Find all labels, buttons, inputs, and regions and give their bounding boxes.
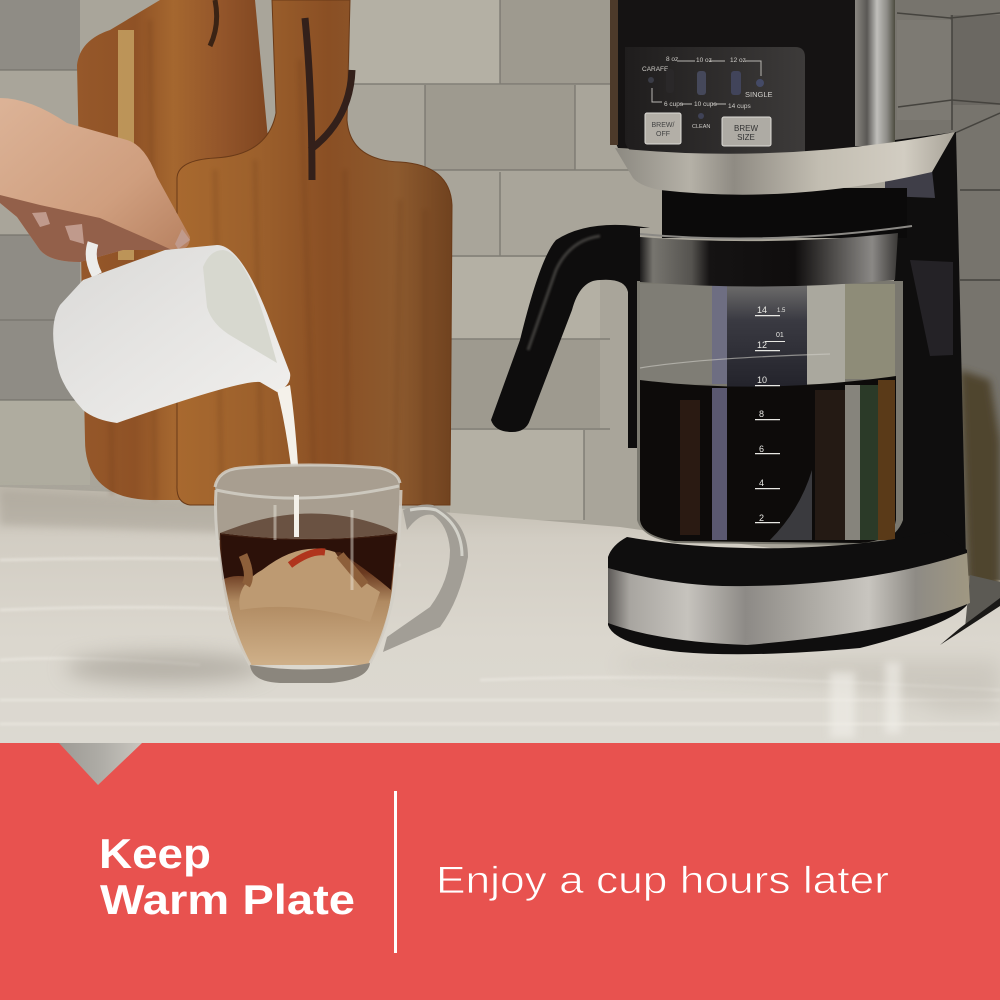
maker right tower (892, 132, 966, 570)
coffee surface and swirls (221, 535, 396, 622)
shadow under mug (65, 653, 265, 683)
carafe scale: 2 (759, 513, 764, 523)
inner milk stream (294, 495, 299, 537)
brew size button (722, 117, 771, 146)
milk jug and hand (0, 98, 302, 540)
jug handle (91, 243, 97, 275)
control panel: CARAFE (642, 66, 669, 73)
front cutting board (177, 0, 452, 505)
mug interior (215, 465, 400, 540)
hand and arm (0, 98, 190, 262)
vertical divider (394, 791, 397, 953)
control panel: SINGLE (745, 90, 773, 99)
dark blob behind maker (960, 370, 1000, 600)
brew off button: BREW/ (652, 122, 675, 129)
maker upper body (610, 0, 895, 158)
mug rim (215, 465, 401, 665)
mug base (250, 663, 370, 683)
heading (99, 830, 355, 923)
heading: Keep (99, 830, 211, 877)
fingernails (32, 212, 190, 249)
carafe scale (640, 305, 830, 523)
brew size button: BREW (734, 124, 758, 133)
coffee in carafe (640, 376, 896, 543)
milk stream (277, 385, 302, 540)
back cutting board (77, 0, 270, 500)
carafe glass (637, 281, 903, 545)
brew size button: SIZE (737, 133, 755, 142)
subtitle: Enjoy a cup hours later (436, 860, 889, 902)
carafe collar (640, 233, 898, 287)
maker neck (662, 188, 907, 238)
carafe scale: 8 (759, 409, 764, 419)
notch pointer (59, 743, 142, 785)
carafe scale: 4 (759, 478, 764, 488)
carafe scale: 10 (757, 375, 767, 385)
control panel: 8 oz (666, 56, 678, 63)
brew off button (645, 113, 681, 144)
heading: Warm Plate (100, 876, 355, 923)
control panel: 10 cups (694, 101, 718, 108)
silver band (615, 132, 955, 195)
control panel: 6 cups (664, 101, 684, 108)
mug reflection (275, 505, 352, 590)
control panel: 10 oz (696, 57, 712, 64)
carafe scale: 12 (757, 340, 767, 350)
glass mug with coffee (215, 465, 468, 683)
maker base (608, 530, 1000, 654)
red banner (0, 743, 1000, 1000)
carafe scale: 14 (757, 305, 767, 315)
carafe upper glass panes (640, 284, 895, 388)
control panel (625, 47, 805, 156)
jug body (53, 245, 290, 423)
control panel: 12 oz (730, 57, 746, 64)
mug handle (383, 505, 468, 652)
counter top (0, 487, 1000, 743)
carafe scale: 01 (776, 332, 784, 339)
cutting boards (77, 0, 452, 505)
stone tile wall (0, 0, 1000, 640)
coffee liquid (220, 533, 397, 665)
stainless side (855, 0, 895, 146)
right dark tiles (895, 0, 1000, 610)
control panel: 14 cups (728, 103, 752, 110)
counter shadow below boards (0, 490, 300, 535)
brew off button: OFF (656, 131, 670, 138)
jug inside (203, 250, 277, 363)
carafe scale: 6 (759, 444, 764, 454)
carafe scale: 1.5 (777, 308, 786, 314)
shadowed fingers (0, 195, 172, 262)
carafe handle (491, 225, 650, 448)
coffee maker (491, 0, 1000, 654)
control panel: CLEAN (692, 124, 710, 130)
